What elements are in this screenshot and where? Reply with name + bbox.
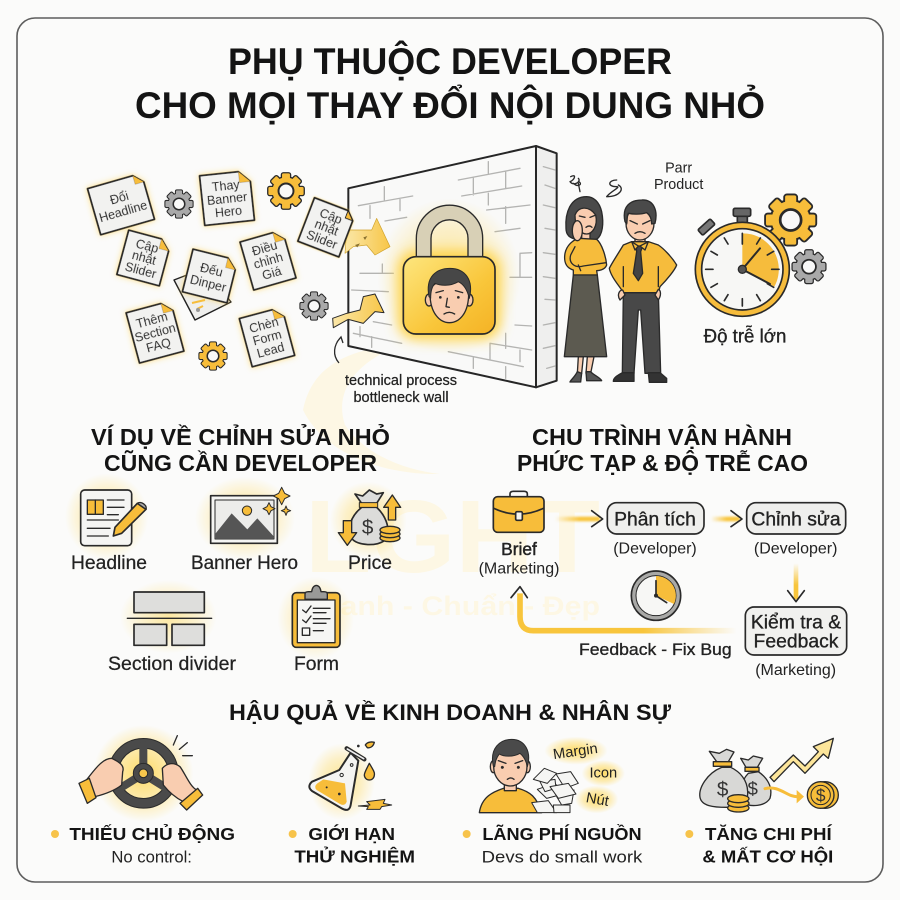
note: Cập nhật Slider at wall: Cập [318, 206, 344, 227]
note: Thay Banner Hero: Hero [214, 204, 243, 220]
label: Margin: Margin [552, 741, 599, 763]
icon: form clipboard [292, 585, 340, 647]
icon: money bags and rising arrow: $ [816, 785, 826, 805]
item: wasted resources and higher cost [463, 737, 838, 867]
note: Thay Banner Hero: Thay [211, 178, 241, 194]
arrow: brief to analysis [555, 511, 603, 527]
arrow: analysis to edit [711, 511, 742, 527]
icon: gears [165, 173, 328, 370]
annotation: technical process bottleneck wall: bottleneck wall [353, 390, 449, 406]
watermark [300, 345, 600, 621]
text: higher cost and lost opportunity: & MẤT CƠ HỘI [702, 846, 833, 867]
note: behind sheet [174, 268, 231, 320]
frowning face [425, 268, 473, 323]
heading [91, 422, 390, 476]
stopwatch with gears [695, 195, 825, 316]
step: Kiểm tra & Feedback: Feedback [754, 631, 839, 652]
labels: Form [294, 654, 339, 675]
icon: price money bag: $ [362, 516, 374, 539]
labels: Feedback - Fix Bug [579, 640, 732, 659]
note: Thêm Section FAQ: FAQ [145, 335, 173, 356]
arrow: edit to review [788, 563, 804, 602]
note: Chèn Form Lead [239, 307, 295, 367]
step: Chỉnh sửa [747, 503, 846, 534]
illustration: wall with lock [348, 146, 825, 387]
label: Parr Product: Parr [665, 161, 692, 177]
labels: (Marketing) [479, 561, 559, 578]
note: Điều chỉnh Giá: Giá [261, 264, 283, 283]
note: Cập nhật Slider: nhật [130, 248, 158, 268]
note: Đổi Headline [87, 173, 155, 235]
padlock [403, 212, 495, 334]
note: Thêm Section FAQ [126, 301, 184, 363]
note: Chèn Form Lead: Chèn [248, 315, 280, 336]
labels [479, 539, 837, 679]
label: Parr Product: Product [654, 177, 703, 193]
icon: section divider [127, 592, 212, 645]
text: wasted resources: Devs do small work [482, 848, 643, 867]
note: Thay Banner Hero: Banner [206, 190, 248, 208]
note: Cập nhật Slider: Slider [123, 260, 158, 281]
worry squiggles [570, 176, 621, 197]
note: Cập nhật Slider at wall: Slider [304, 228, 339, 252]
title: CHO MỌI THAY ĐỔI NỘI DUNG NHỎ [135, 83, 765, 126]
annotation: technical process bottleneck wall: technical process [345, 373, 457, 389]
step: Chỉnh sửa: Chỉnh sửa [751, 509, 841, 530]
illustration: change request notes and gears [87, 171, 328, 370]
labels: Brief [501, 539, 537, 559]
text: limited experiments: GIỚI HẠN [308, 823, 395, 844]
note: Cập nhật Slider at wall: nhật [313, 217, 341, 239]
glow behind lock [377, 198, 521, 355]
panel: consequences [51, 700, 838, 867]
text: limited experiments [289, 823, 415, 867]
note: Cập nhật Slider at wall [298, 198, 356, 257]
note: Đếu Dinper: Đếu [199, 261, 224, 280]
label: Parr Product [654, 161, 703, 193]
note: Thay Banner Hero [200, 171, 254, 225]
text: limited experiments: THỬ NGHIỆM [294, 846, 415, 867]
icon: headline document [81, 490, 146, 546]
text: lack of control [51, 823, 235, 867]
icon: price money bag [338, 490, 401, 545]
note: Đếu Dinper [182, 249, 238, 303]
step: Kiểm tra & Feedback: Kiểm tra & [751, 612, 841, 634]
icon: broken wall shards [298, 198, 390, 328]
heading: PHỨC TẠP & ĐỘ TRỄ CAO [517, 448, 808, 476]
label: Nút: Nút [585, 790, 610, 810]
step: Kiểm tra & Feedback [745, 607, 847, 655]
text: lack of control: THIẾU CHỦ ĐỘNG [69, 823, 235, 844]
note: Thêm Section FAQ: Section [133, 321, 177, 345]
note: Cập nhật Slider: Cập [134, 237, 160, 256]
annotation: technical process bottleneck wall [335, 337, 457, 406]
icon: money bags and rising arrow: $ [717, 778, 729, 801]
text: higher cost and lost opportunity [685, 823, 833, 867]
note: Đổi Headline: Headline [98, 198, 149, 225]
labels: (Developer) [613, 540, 697, 557]
note: Điều chỉnh Giá: Điều [250, 238, 279, 259]
item: lack of control and limited experiments [51, 725, 415, 867]
note: Chèn Form Lead: Form [251, 327, 283, 349]
title [135, 40, 765, 126]
labels: Section divider [108, 654, 237, 675]
step: Phân tích: Phân tích [614, 509, 696, 530]
heading: CŨNG CẦN DEVELOPER [104, 449, 377, 476]
wall front [348, 146, 536, 387]
labels: Banner Hero [191, 553, 298, 574]
note: Chèn Form Lead: Lead [255, 340, 286, 361]
note: Thêm Section FAQ: Thêm [135, 310, 169, 331]
labels: Price [348, 553, 392, 574]
icon: money bags and rising arrow [700, 738, 838, 812]
note: Cập nhật Slider [117, 230, 171, 286]
icon: clock [631, 571, 681, 620]
labels: (Marketing) [755, 662, 836, 679]
labels: (Developer) [754, 540, 837, 557]
heading: CHU TRÌNH VẬN HÀNH [532, 423, 792, 450]
heading: HẬU QUẢ VỀ KINH DOANH & NHÂN SỰ [229, 700, 672, 725]
watermark: LGHT [305, 479, 600, 594]
label: Độ trễ lớn: Độ trễ lớn [704, 325, 786, 348]
arrow: feedback loop [511, 587, 737, 631]
icon: money bags and rising arrow: $ [747, 778, 758, 799]
note: Điều chỉnh Giá: chỉnh [252, 250, 285, 272]
heading [517, 423, 808, 476]
icon: developer with paper pile [479, 737, 625, 813]
step: Phân tích [607, 503, 704, 534]
note: Đếu Dinper: Dinper [189, 273, 228, 295]
wall side [536, 146, 557, 387]
labels: Headline [71, 553, 147, 574]
icon: briefcase [493, 491, 544, 532]
note: Điều chỉnh Giá [240, 230, 296, 290]
woman [564, 197, 607, 382]
label: Icon: Icon [589, 766, 617, 782]
panel: operating cycle [479, 423, 847, 679]
note: Đổi Headline: Đổi [108, 189, 130, 208]
text: wasted resources [463, 823, 643, 867]
panel: small edit examples [65, 422, 407, 675]
icon: steering wheel [79, 725, 203, 822]
icon: banner hero [211, 487, 291, 543]
heading: VÍ DỤ VỀ CHỈNH SỬA NHỎ [91, 422, 390, 450]
title: PHỤ THUỘC DEVELOPER [228, 40, 672, 82]
text: higher cost and lost opportunity: TĂNG CHI PHÍ [705, 823, 833, 844]
text: wasted resources: LÃNG PHÍ NGUỒN [482, 823, 642, 844]
icon: spilled flask [308, 742, 392, 820]
labels [71, 553, 392, 675]
man [609, 200, 677, 382]
text: lack of control: No control: [111, 848, 192, 867]
watermark: Nhanh - Chuẩn - Đẹp [300, 591, 600, 621]
